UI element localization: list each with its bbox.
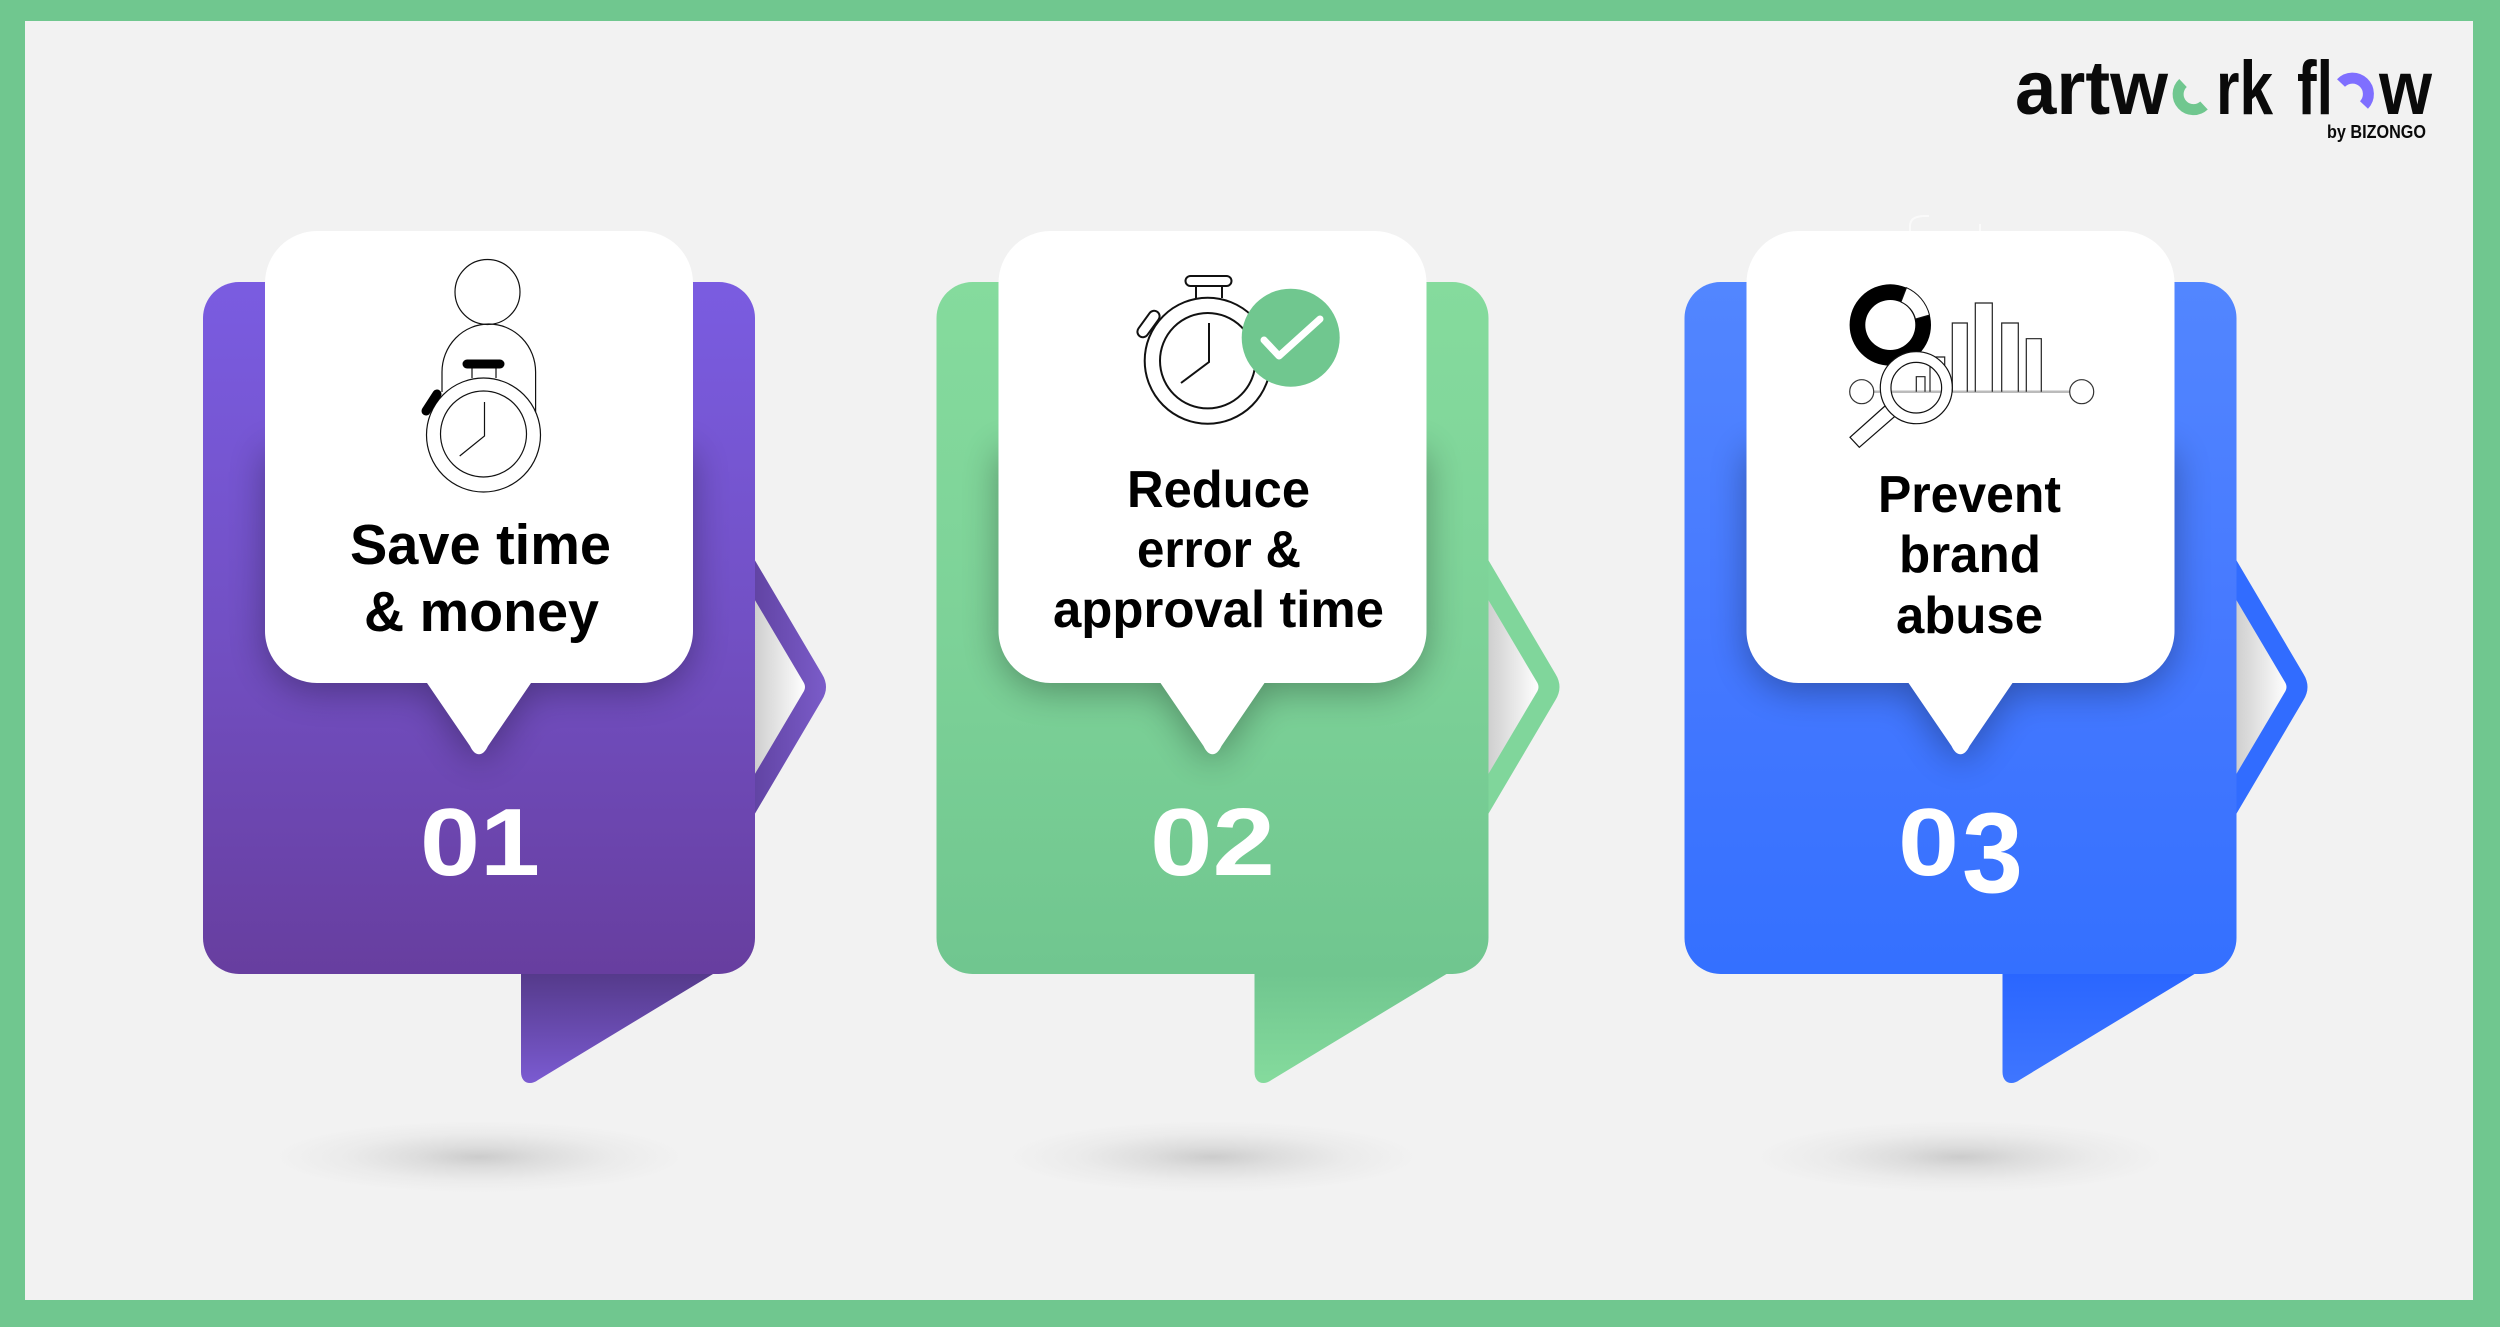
white callout <box>265 231 693 754</box>
heading: & money <box>364 580 599 644</box>
side arrow <box>1464 518 1560 856</box>
icon: stopwatch with check <box>1135 276 1340 424</box>
icon: charts with magnifier <box>1850 216 2094 447</box>
card body <box>1684 282 2236 974</box>
heading: Prevent <box>1878 466 2061 524</box>
logo word part: w: w <box>2378 46 2433 131</box>
logo letter o: purple arc <box>2341 78 2368 105</box>
logo letter o: green arc <box>2178 83 2204 110</box>
logo tagline: by BIZONGO <box>2327 122 2426 142</box>
check badge <box>1242 289 1340 387</box>
card body <box>936 282 1488 974</box>
magnifier <box>1850 352 1952 447</box>
logo word part: rk: rk <box>2216 46 2274 131</box>
card body <box>203 282 755 974</box>
panel: step 01 save time and money <box>203 231 826 1193</box>
side arrow <box>2212 518 2308 856</box>
step number <box>1898 789 2023 917</box>
heading <box>1053 461 1384 639</box>
baseline <box>1873 390 2070 393</box>
heading: abuse <box>1896 587 2043 645</box>
bar chart <box>1916 303 2041 392</box>
logo word part: artw: artw <box>2015 46 2169 131</box>
panel: step 03 prevent brand abuse <box>1684 216 2308 1193</box>
icon: person with stopwatch <box>426 260 540 492</box>
logo: artwork flow by BIZONGO <box>2015 46 2433 142</box>
callout shadow <box>265 452 693 760</box>
step number: 0 <box>1898 789 1959 896</box>
floor shadow <box>1756 1121 2166 1193</box>
white callout <box>1746 231 2174 754</box>
step number: 02 <box>1150 789 1275 896</box>
heading: brand <box>1899 526 2041 584</box>
floor shadow <box>274 1121 684 1193</box>
heading: Save time <box>350 513 611 577</box>
donut chart <box>1850 284 1931 366</box>
folded tail <box>2002 960 2212 1083</box>
step number: 3 <box>1962 790 2023 917</box>
callout shadow <box>998 452 1426 760</box>
heading <box>350 513 611 644</box>
end circles <box>1850 380 2094 404</box>
panel: step 02 reduce error and approval time <box>936 231 1560 1193</box>
white callout <box>998 231 1426 754</box>
folded tail <box>521 960 730 1083</box>
step number: 01 <box>420 789 540 896</box>
stopwatch <box>1135 276 1271 424</box>
heading: Reduce <box>1127 461 1310 519</box>
side arrow <box>730 518 826 856</box>
callout shadow <box>1746 452 2174 760</box>
heading <box>1878 466 2061 645</box>
logo word part: fl: fl <box>2297 46 2333 131</box>
heading: error & <box>1137 521 1301 579</box>
floor shadow <box>1008 1121 1418 1193</box>
heading: approval time <box>1053 581 1384 639</box>
folded tail <box>1254 960 1464 1083</box>
